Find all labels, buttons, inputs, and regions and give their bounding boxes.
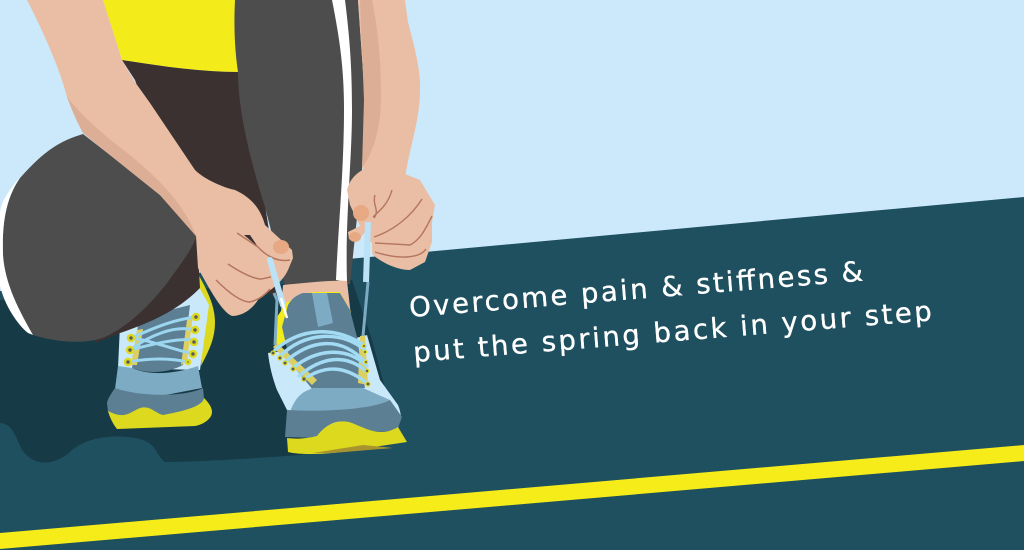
shoe heel collar <box>195 262 215 366</box>
left knee shorts shadow <box>90 236 200 343</box>
lace light patch <box>355 242 372 258</box>
teal ground band <box>0 197 1024 550</box>
shoe toe cap <box>115 366 202 398</box>
eyelets <box>271 344 370 386</box>
shorts <box>122 60 280 300</box>
shirt <box>103 0 238 72</box>
left shoe <box>107 262 215 429</box>
eyelet strips <box>273 335 368 385</box>
lace strand <box>274 293 277 345</box>
lace held <box>270 260 283 305</box>
thumbnail <box>273 240 289 254</box>
left arm <box>27 0 293 316</box>
yellow road stripe <box>0 445 1024 549</box>
shoe upper <box>118 285 209 370</box>
shoelace left <box>270 260 287 345</box>
sole <box>287 421 407 454</box>
right arm <box>358 0 420 178</box>
figure shadow on ground <box>0 280 395 463</box>
shoe tongue <box>132 305 190 372</box>
lace strand <box>363 282 368 336</box>
fingernails <box>353 205 369 221</box>
left hand details <box>216 233 290 302</box>
right hand details <box>349 190 432 257</box>
laces <box>275 332 368 384</box>
shoe midsole <box>107 388 205 420</box>
finger lines <box>373 190 432 257</box>
toe cap <box>290 388 390 412</box>
ankle <box>280 281 352 325</box>
lace tip <box>281 298 287 318</box>
running figure <box>0 0 435 454</box>
tongue stripe <box>312 293 333 327</box>
knuckle lines <box>216 233 290 302</box>
shoe upper <box>268 335 401 437</box>
collar yellow <box>275 292 351 345</box>
shoe laces <box>128 317 196 362</box>
line 2: put the spring back in your step <box>412 295 933 369</box>
legging white stripe <box>332 0 352 282</box>
midsole <box>285 400 402 438</box>
right hand <box>347 168 435 270</box>
left thigh legging <box>3 134 197 342</box>
shoe sole <box>108 398 212 429</box>
tongue <box>282 293 365 390</box>
thigh white stripe <box>0 177 33 335</box>
shoelace right <box>355 222 372 336</box>
arm shadow <box>67 97 196 236</box>
line 1: Overcome pain & stiffness & <box>408 256 864 324</box>
sole shade <box>313 445 393 453</box>
eyelet strips <box>131 315 193 365</box>
headline text <box>408 256 933 369</box>
finger gap <box>244 235 258 247</box>
right shoe <box>268 292 407 454</box>
shoe eyelets <box>125 314 199 365</box>
lace held <box>366 222 368 282</box>
right arm shadow <box>360 0 381 168</box>
right leg legging <box>234 0 365 285</box>
